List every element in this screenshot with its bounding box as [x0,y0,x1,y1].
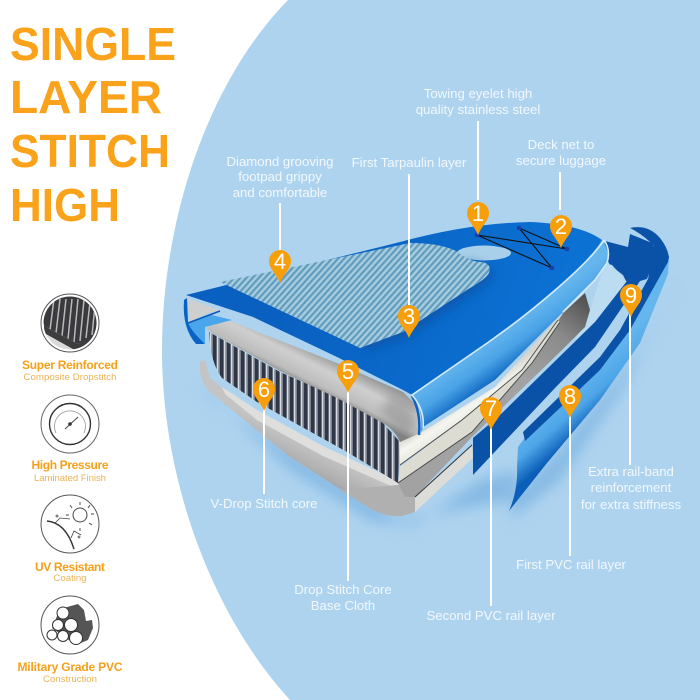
callout 4: diamond grooving footpad: 4 [274,249,286,274]
callout 9: extra rail-band reinforcement: 9 [625,283,637,308]
title: STITCH [10,125,170,177]
callout 1: towing eyelet [416,86,540,235]
callout 2: deck net: 2 [555,214,567,239]
feature: high pressure [32,395,109,484]
title: HIGH [10,179,120,231]
callout 1: towing eyelet: quality stainless steel [416,102,540,117]
callout 9: extra rail-band reinforcement: for extra stiffness [581,497,681,512]
callout 7: second pvc rail layer: 7 [485,396,497,421]
feature: military grade pvc [18,596,123,685]
soft shadows [200,275,680,525]
bottom layer light strip [222,387,398,489]
bottom layer end cap [340,485,415,516]
title: LAYER [10,71,162,123]
sublabel: coating: Coating [54,573,86,584]
title: SINGLE [10,18,176,70]
label: uv resistant: UV Resistant [35,560,105,574]
label: high pressure: High Pressure [32,458,109,472]
sublabel: construction: Construction [43,674,97,685]
callout 4: diamond grooving footpad: footpad grippy [238,169,322,184]
callout 9: extra rail-band reinforcement [581,283,681,512]
callout 8: first pvc rail layer: First PVC rail layer [516,557,627,572]
rail layer 7: second pvc rail [473,281,640,475]
callout 2: deck net: Deck net to [528,137,594,152]
rail layer: upper dark nose band [603,234,657,283]
callout 9: extra rail-band reinforcement: reinforcement [591,480,672,495]
sublabel: composite dropstitch: Composite Dropstitch [24,372,116,383]
callout 3: first tarpaulin layer: 3 [403,304,415,329]
top grey base cloth [206,319,420,442]
callout 3: first tarpaulin layer: First Tarpaulin layer [352,155,467,170]
callout 5: drop stitch core base cloth [294,359,392,613]
icon: sun and surface [41,495,99,553]
left flap of top layer [184,298,232,344]
drop stitch core [209,332,400,483]
callout 1: towing eyelet: 1 [472,201,484,226]
board exploded diagram [184,222,680,525]
bottom grey layer [200,360,425,516]
blue background panel [162,0,700,700]
callout 5: drop stitch core base cloth: 5 [342,359,354,384]
callout 2: deck net [516,137,606,248]
lower tray layer [415,445,473,512]
outer crescent [630,227,669,279]
callout 7: second pvc rail layer: Second PVC rail layer [426,608,556,623]
callout 9: extra rail-band reinforcement: Extra rail-band [588,464,674,479]
callout 4: diamond grooving footpad [226,154,334,283]
callout 2: deck net: secure luggage [516,153,606,168]
label: super reinforced: Super Reinforced [22,358,118,372]
callout 4: diamond grooving footpad: and comfortable [233,185,327,200]
callout 6: v-drop stitch core: 6 [258,377,270,402]
callout 5: drop stitch core base cloth: Base Cloth [311,598,375,613]
rail layer 8: first pvc rail light band [509,258,669,511]
rail layer 9: extra reinforcement band [523,256,669,441]
middle grey side layer [398,293,590,497]
white rail edge line [412,240,604,428]
footpad shadow [360,260,495,351]
callout 6: v-drop stitch core: V-Drop Stitch core [210,496,318,511]
callout 8: first pvc rail layer: 8 [564,384,576,409]
callout 1: towing eyelet: Towing eyelet high [424,86,532,101]
deck net [475,226,569,270]
pale interior under nose [575,263,627,340]
off-white second strip [398,320,560,483]
callout 7: second pvc rail layer [426,396,556,623]
icon: pressure gauge [41,395,99,453]
nose light ellipse [457,246,511,260]
label: military grade pvc: Military Grade PVC [18,660,123,674]
callout 8: first pvc rail layer [516,384,627,572]
corner arc [412,396,419,435]
callout 5: drop stitch core base cloth: Drop Stitch Core [294,582,392,597]
callout 6: v-drop stitch core [210,377,318,511]
callout 4: diamond grooving footpad: Diamond grooving [226,154,334,169]
callout 3: first tarpaulin layer [352,155,467,338]
feature: uv resistant [35,495,105,584]
diamond grooved footpad [220,243,490,348]
white side layer [400,314,563,465]
icon: drop stitch [40,294,100,352]
deck top surface [186,222,602,395]
sublabel: laminated finish: Laminated Finish [34,473,106,484]
rail band on deck edge [412,240,608,432]
icon: stacked tubes [41,596,99,654]
feature: super reinforced [22,294,118,383]
base cloth corner shading [380,395,416,438]
title [10,18,176,231]
